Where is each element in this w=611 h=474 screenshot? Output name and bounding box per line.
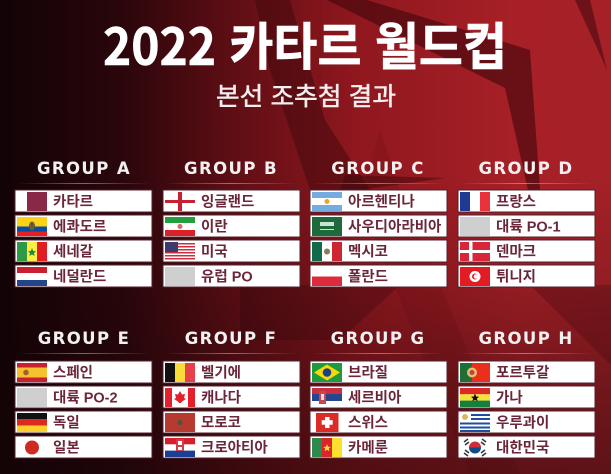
panel: group H — [458, 329, 595, 458]
row: 대륙 PO-1: 대륙 PO-1 — [496, 218, 561, 236]
heading: group B: GROUP B — [184, 159, 278, 178]
row: 포르투갈: 포르투갈 — [496, 364, 549, 382]
row: 우루과이: 우루과이 — [496, 414, 549, 432]
heading: group H: GROUP H — [478, 329, 574, 348]
heading: group C: GROUP C — [331, 159, 425, 178]
row: 캐나다: 캐나다 — [201, 390, 242, 406]
row: 에콰도르: 에콰도르 — [53, 218, 106, 236]
row: 카메룬: 카메룬 — [348, 440, 388, 456]
row: 잉글랜드: 잉글랜드 — [201, 194, 254, 210]
row: 프랑스: 프랑스 — [496, 194, 536, 210]
panel: group G — [310, 329, 447, 458]
row: 아르헨티나: 아르헨티나 — [348, 194, 415, 210]
row: 멕시코: 멕시코 — [348, 244, 388, 260]
panel: group D — [458, 159, 595, 287]
row: 세르비아: 세르비아 — [348, 390, 402, 406]
row: 덴마크: 덴마크 — [496, 244, 536, 260]
row: 벨기에: 벨기에 — [201, 364, 241, 382]
heading: group A: GROUP A — [37, 159, 131, 178]
row: 미국: 미국 — [201, 244, 228, 260]
panel: group F — [163, 329, 300, 458]
row: 모로코: 모로코 — [201, 416, 241, 432]
row: 대륙 PO-2: 대륙 PO-2 — [53, 390, 118, 406]
row: 크로아티아: 크로아티아 — [201, 440, 268, 456]
title: 2022 카타르 월드컵 — [103, 6, 507, 80]
row: 일본: 일본 — [53, 440, 80, 456]
row: 대한민국: 대한민국 — [496, 440, 549, 456]
heading: group F: GROUP F — [185, 329, 277, 348]
panel: group C — [310, 159, 447, 287]
heading: group D: GROUP D — [478, 159, 574, 178]
row: 사우디아라비아: 사우디아라비아 — [348, 218, 442, 236]
row: 스위스: 스위스 — [348, 414, 388, 432]
row: 튀니지: 튀니지 — [496, 268, 536, 286]
row: 유럽 PO: 유럽 PO — [201, 268, 253, 286]
row: 카타르: 카타르 — [53, 194, 93, 210]
row: 폴란드: 폴란드 — [348, 268, 388, 286]
heading: group E: GROUP E — [38, 329, 130, 348]
panel: group E — [15, 329, 152, 458]
row: 브라질: 브라질 — [348, 364, 388, 382]
row: 가나: 가나 — [496, 390, 523, 406]
heading: group G: GROUP G — [331, 329, 425, 348]
row: 세네갈: 세네갈 — [53, 244, 93, 260]
panel: group A — [15, 159, 152, 287]
row: 네덜란드: 네덜란드 — [53, 268, 106, 286]
row: 독일: 독일 — [53, 414, 80, 432]
subtitle: 본선 조추첨 결과 — [216, 83, 396, 111]
row: 이란: 이란 — [201, 218, 228, 236]
row: 스페인: 스페인 — [53, 364, 93, 382]
panel: group B — [163, 159, 300, 287]
